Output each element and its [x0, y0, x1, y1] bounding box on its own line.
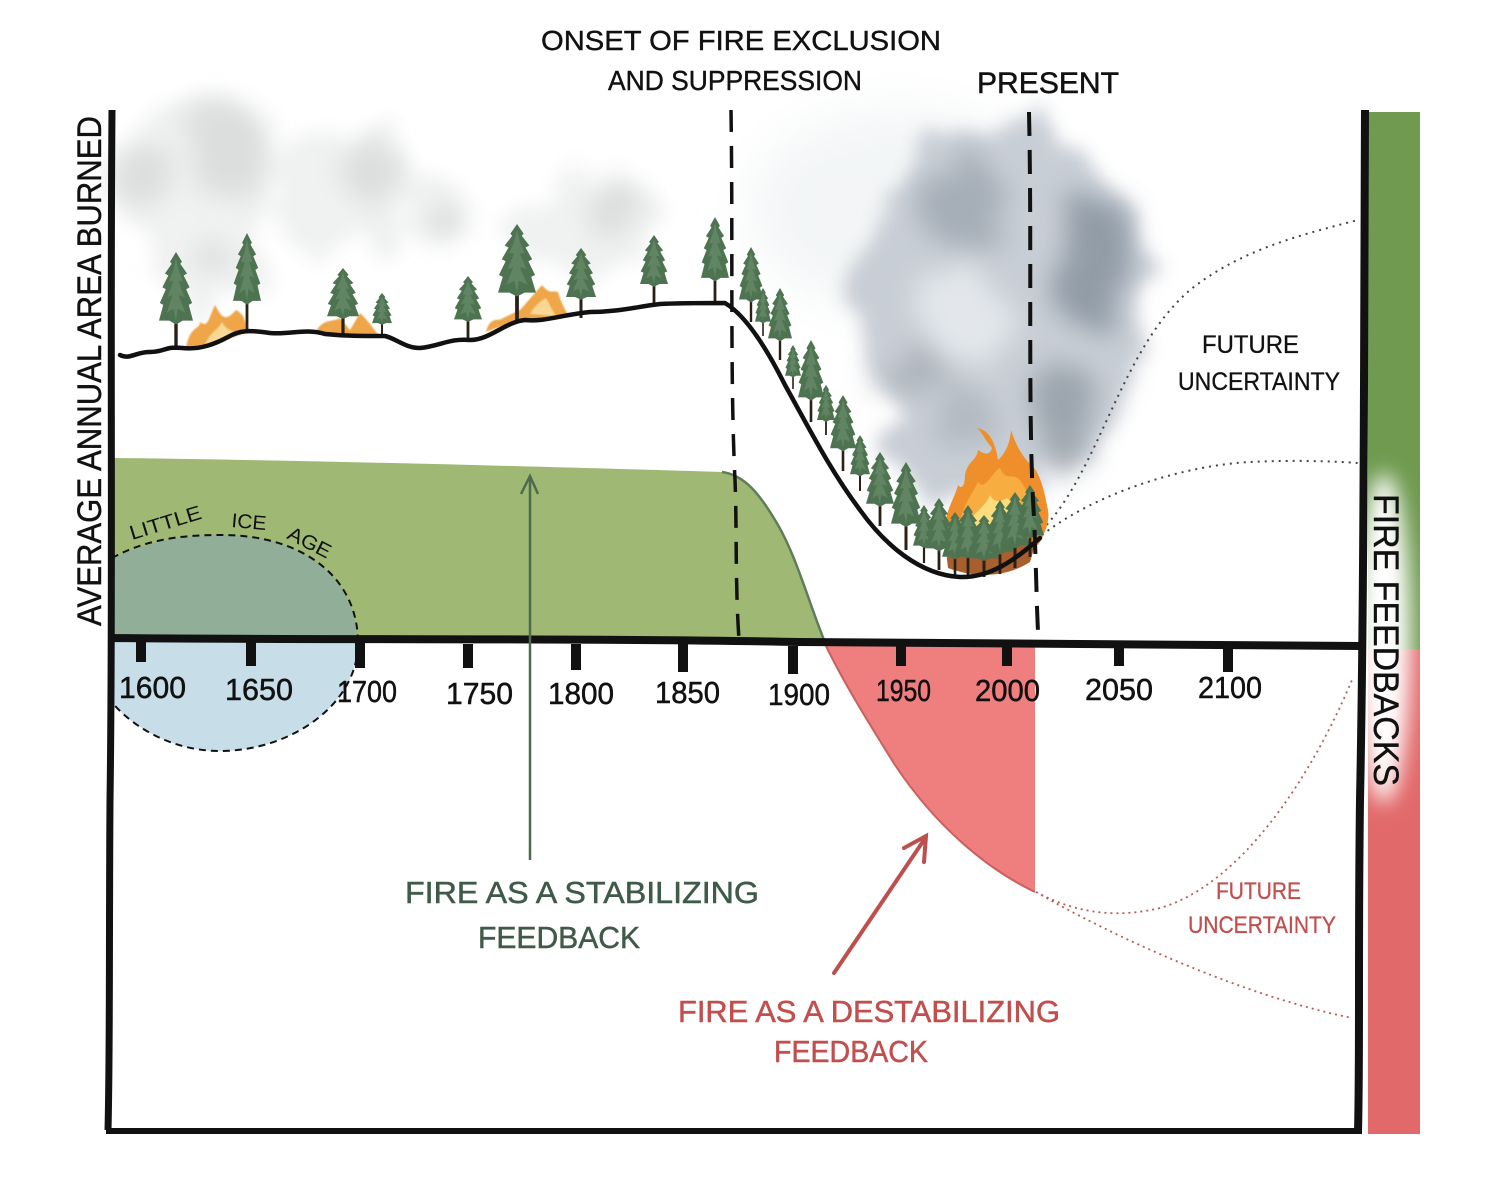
future uncertainty, destabilizing: FUTURE [1216, 878, 1301, 905]
forest: dense post-suppression trees [739, 247, 1044, 577]
present dashed line [1029, 112, 1038, 632]
burned area line [120, 303, 1040, 577]
destabilizing arrow [834, 836, 926, 973]
little ice age label: ICE [231, 510, 267, 535]
little ice age label [127, 502, 335, 563]
axis year labels: 1900 [768, 677, 830, 712]
little ice age dashed outline [110, 535, 358, 751]
stabilizing feedback green area [114, 458, 824, 640]
stabilizing label: FEEDBACK [478, 920, 640, 955]
forest: historic open forest trees [159, 217, 729, 350]
right axis [1358, 110, 1365, 1132]
axis year labels: 2050 [1085, 672, 1153, 707]
heading: present: PRESENT [977, 67, 1119, 100]
axis year labels: 2000 [975, 673, 1040, 708]
stabilizing label: FIRE AS A STABILIZING [405, 875, 759, 910]
axis year labels: 1750 [446, 676, 513, 711]
stabilizing label [405, 875, 759, 955]
big flames at present [945, 428, 1048, 575]
low flame cores [205, 298, 556, 345]
destabilizing label [678, 994, 1060, 1069]
onset of suppression dashed line [731, 110, 739, 640]
future uncertainty, stabilizing: UNCERTAINTY [1178, 368, 1340, 396]
fire feedbacks bar label: FIRE FEEDBACKS [1366, 494, 1405, 786]
heading: onset of fire exclusion and suppression: ONSET OF FIRE EXCLUSION [541, 25, 941, 56]
destabilizing feedback red area [826, 646, 1035, 892]
smoke: dark plume over the present-day fire [750, 110, 1150, 505]
green area edge [722, 472, 824, 640]
heading: onset of fire exclusion and suppression: AND SUPPRESSION [608, 65, 862, 96]
axis year labels: 1800 [548, 676, 614, 711]
axis year labels: 1950 [876, 673, 931, 708]
y axis title: AVERAGE ANNUAL AREA BURNED [71, 116, 109, 626]
axis year labels [119, 670, 1262, 712]
uncertainty dotted projections, stabilizing [1042, 220, 1358, 535]
vertical axis [108, 110, 112, 1130]
smoke: left light clouds [105, 105, 655, 310]
future uncertainty, destabilizing [1188, 878, 1336, 939]
destabilizing label: FIRE AS A DESTABILIZING [678, 994, 1060, 1029]
stabilizing arrow [521, 476, 538, 860]
heading: onset of fire exclusion and suppression [541, 25, 941, 96]
axis year labels: 1700 [337, 674, 397, 709]
little ice age ellipse upper part over the green area [114, 535, 357, 640]
future uncertainty, stabilizing [1178, 331, 1340, 396]
time axis [108, 638, 1362, 674]
destabilizing label: FEEDBACK [774, 1034, 928, 1069]
uncertainty dotted projections, destabilizing [1036, 680, 1352, 1018]
axis year labels: 2100 [1198, 670, 1262, 705]
little ice age label: AGE [284, 523, 335, 563]
little ice age label: LITTLE [127, 502, 204, 545]
bottom axis [106, 1128, 1362, 1134]
axis year labels: 1850 [655, 675, 720, 710]
axis year labels: 1650 [225, 672, 293, 707]
future uncertainty, destabilizing: UNCERTAINTY [1188, 912, 1336, 939]
red area edge [826, 646, 1035, 892]
little ice age ellipse lower half [110, 535, 358, 751]
axis year labels: 1600 [119, 670, 186, 705]
low flames, historic surface fires [186, 285, 570, 348]
right side bar: fire feedbacks [1340, 112, 1444, 1134]
future uncertainty, stabilizing: FUTURE [1202, 331, 1299, 359]
